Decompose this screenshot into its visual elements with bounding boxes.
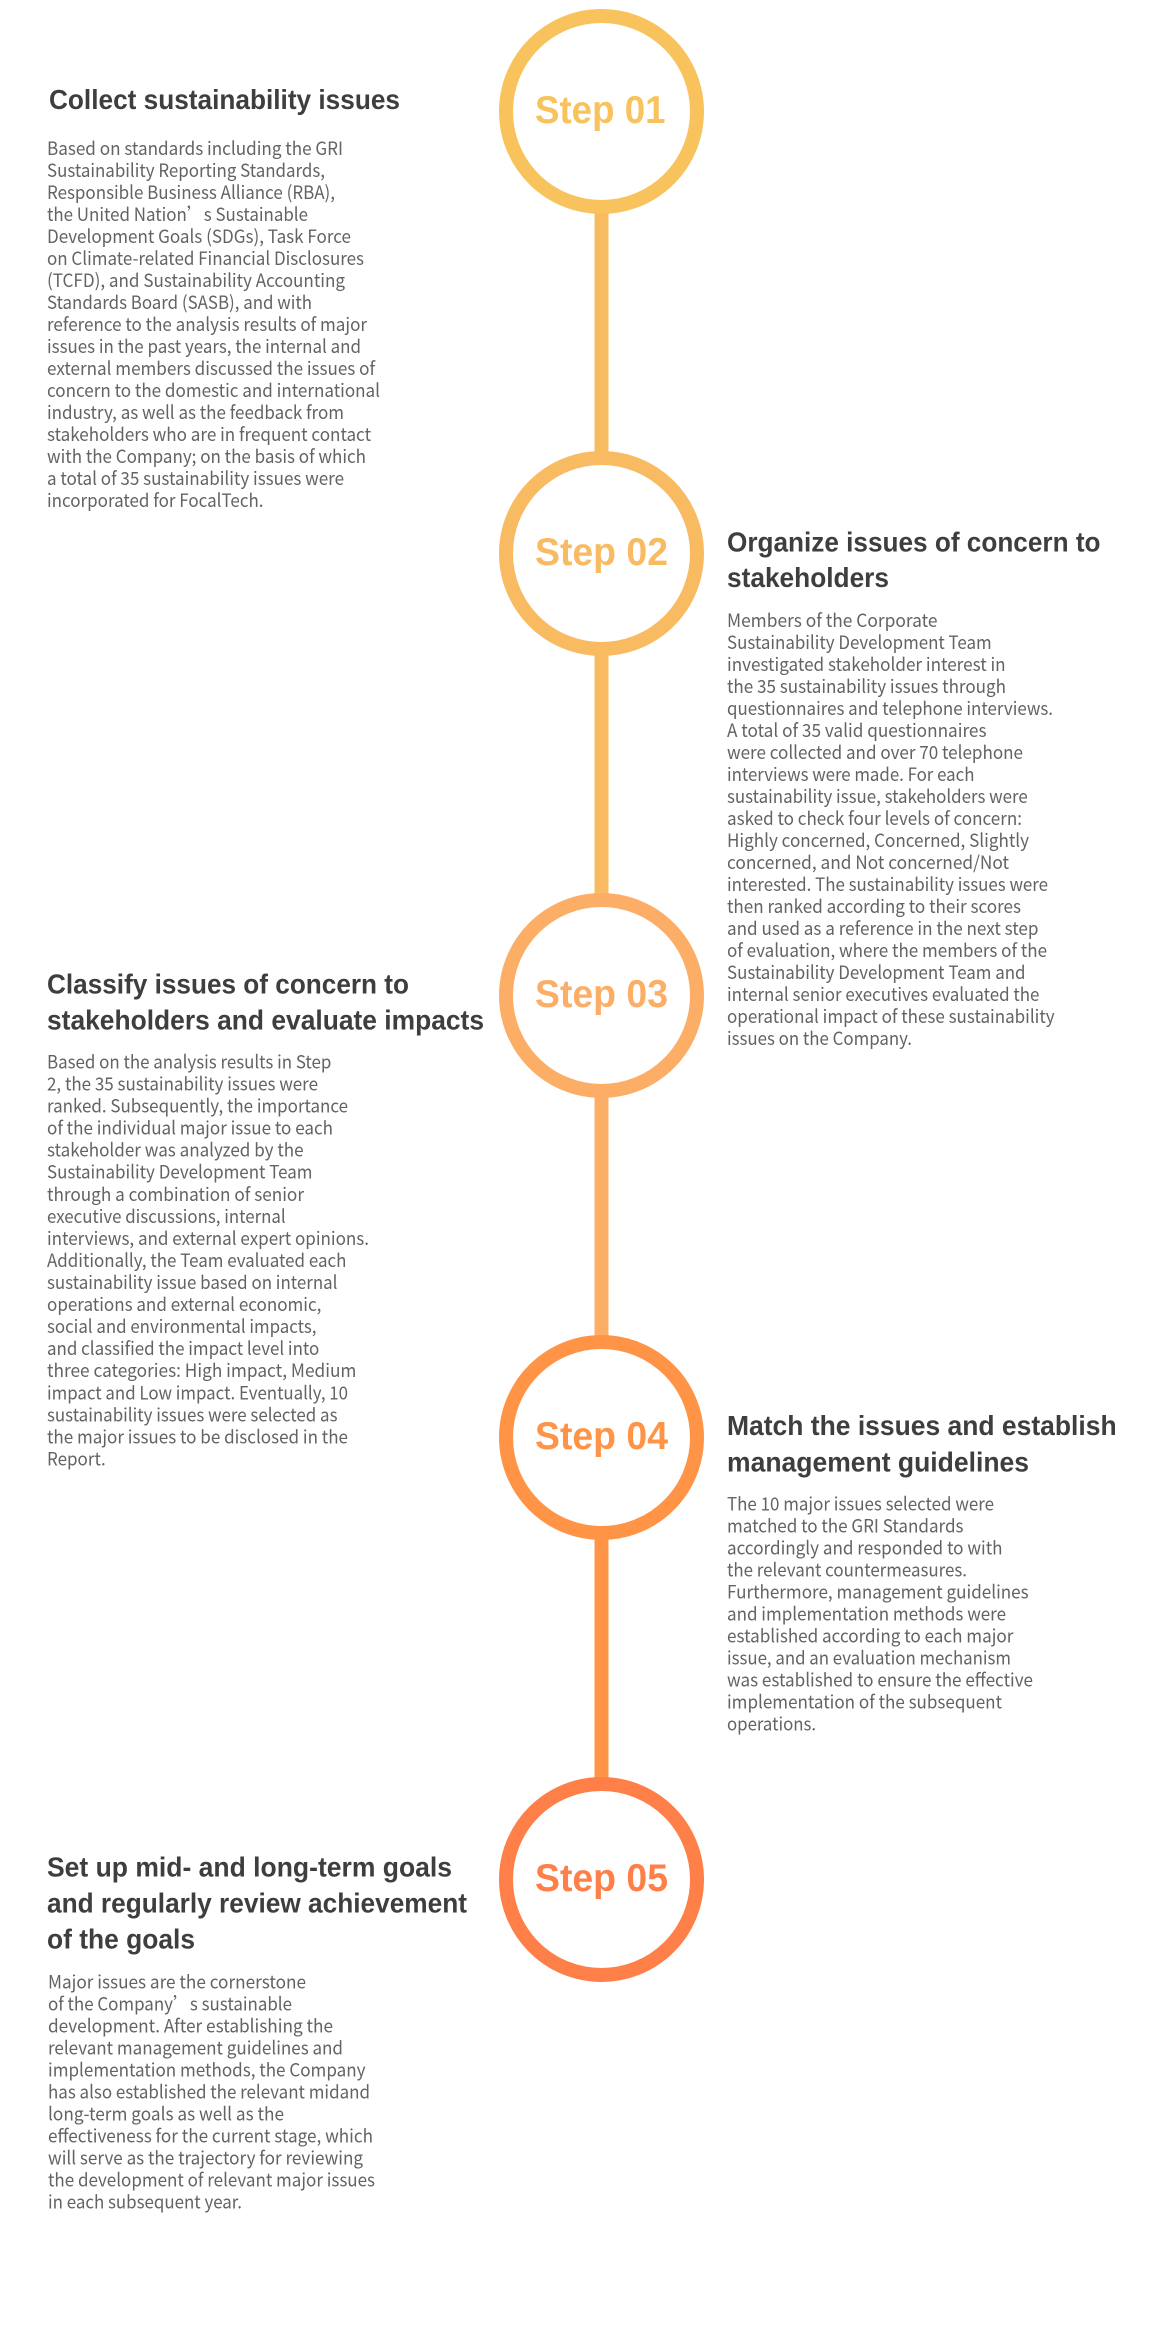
heading: step 04: management guidelines	[727, 1446, 1029, 1478]
body text: step 05: relevant management guidelines and	[48, 2035, 343, 2061]
body text: step 01: external members discussed the issues of	[47, 355, 376, 381]
body text: step 04: operations.	[727, 1711, 816, 1737]
body text: step 04: implementation of the subsequent	[727, 1689, 1002, 1715]
heading: step 02: Organize issues of concern to	[727, 526, 1100, 558]
body text: step 05: in each subsequent year.	[48, 2189, 242, 2215]
body text: step 04: Furthermore, management guidelines	[727, 1579, 1029, 1605]
step 03 badge	[506, 900, 697, 1091]
heading: step 05: Set up mid- and long-term goals	[47, 1852, 452, 1883]
heading: step 03: Classify issues of concern to	[47, 968, 409, 1000]
body text: step 03: interviews, and external expert opinions.	[47, 1225, 369, 1251]
body text: step 03	[47, 1048, 369, 1472]
body text: step 05	[48, 1969, 375, 2215]
body text: step 02: questionnaires and telephone interviews.	[727, 695, 1053, 721]
body text: step 05: the development of relevant major issues	[48, 2167, 375, 2193]
body text: step 03: social and environmental impacts,	[47, 1313, 316, 1339]
body text: step 05: long-term goals as well as the	[48, 2101, 284, 2127]
step 03 badge: Step 03	[535, 973, 668, 1016]
body text: step 01: Responsible Business Alliance (RBA),	[47, 179, 335, 205]
body text: step 02: Sustainability Development Team and	[727, 959, 1026, 985]
body text: step 01: (TCFD), and Sustainability Accounting	[47, 267, 345, 293]
body text: step 04: and implementation methods were	[727, 1601, 1006, 1627]
body text: step 03: three categories: High impact, Medium	[47, 1357, 356, 1383]
heading: step 04: Match the issues and establish	[727, 1410, 1117, 1441]
body text: step 04: The 10 major issues selected were	[727, 1491, 994, 1517]
body text: step 05: development. After establishing the	[48, 2013, 333, 2039]
body text: step 03: Report.	[47, 1446, 106, 1472]
body text: step 01: Sustainability Reporting Standards,	[47, 157, 325, 183]
body text: step 02: sustainability issue, stakeholders were	[727, 783, 1028, 809]
connector: step 04 to 05	[594, 1536, 608, 1780]
body text: step 03: sustainability issue based on internal	[47, 1269, 338, 1295]
body text: step 04: established according to each major	[727, 1623, 1014, 1649]
body text: step 03: the major issues to be disclosed in the	[47, 1424, 348, 1450]
body text: step 02: Sustainability Development Team	[727, 629, 992, 655]
connector: step 03 to 04	[594, 1094, 608, 1338]
connector: step 02 to 03	[594, 652, 608, 896]
body text: step 01: concern to the domestic and international	[47, 377, 380, 403]
body text: step 01: with the Company; on the basis of which	[47, 443, 366, 469]
step 05 badge: Step 05	[535, 1857, 668, 1900]
body text: step 03: ranked. Subsequently, the importance	[47, 1092, 348, 1118]
heading: step 04	[727, 1410, 1117, 1478]
body text: step 01: stakeholders who are in frequent contact	[47, 421, 371, 447]
body text: step 02: the 35 sustainability issues through	[727, 673, 1006, 699]
body text: step 03: impact and Low impact. Eventually, 10	[47, 1379, 348, 1405]
body text: step 02: A total of 35 valid questionnaires	[727, 717, 986, 743]
body text: step 03: Based on the analysis results in Step	[47, 1048, 331, 1074]
body text: step 02: and used as a reference in the next step	[727, 915, 1038, 941]
step 04 badge: Step 04	[535, 1415, 668, 1458]
body text: step 01: incorporated for FocalTech.	[47, 487, 264, 513]
body text: step 03: 2, the 35 sustainability issues were	[47, 1070, 318, 1096]
body text: step 01: the United Nation’s Sustainable	[47, 201, 308, 227]
body text: step 04	[727, 1491, 1033, 1737]
step 01 badge	[506, 16, 697, 207]
heading: step 02: stakeholders	[727, 562, 889, 593]
body text: step 05: Major issues are the cornerstone	[48, 1969, 306, 1995]
heading: step 03: stakeholders and evaluate impacts	[47, 1004, 484, 1036]
heading: step 02	[727, 526, 1100, 593]
body text: step 01: industry, as well as the feedback from	[47, 399, 344, 425]
body text: step 03: Sustainability Development Team	[47, 1159, 312, 1185]
body text: step 03: sustainability issues were selected as	[47, 1401, 338, 1427]
body text: step 02: interviews were made. For each	[727, 761, 974, 787]
body text: step 02: investigated stakeholder interest in	[727, 651, 1006, 677]
body text: step 02: were collected and over 70 telephone	[727, 739, 1023, 765]
body text: step 03: and classified the impact level into	[47, 1335, 319, 1361]
step 01 badge: Step 01	[535, 89, 666, 132]
body text: step 05: implementation methods, the Company	[48, 2057, 366, 2083]
step 02 badge: Step 02	[535, 531, 668, 574]
heading: step 05	[47, 1852, 467, 1954]
body text: step 03: through a combination of senior	[47, 1181, 305, 1207]
body text: step 02: then ranked according to their scores	[727, 893, 1021, 919]
body text: step 02: operational impact of these sustainability	[727, 1003, 1055, 1029]
body text: step 05: has also established the relevant midand	[48, 2079, 370, 2105]
body text: step 01: Standards Board (SASB), and with	[47, 289, 312, 315]
body text: step 02: asked to check four levels of concern:	[727, 805, 1022, 831]
body text: step 03: Additionally, the Team evaluated each	[47, 1247, 346, 1273]
body text: step 02: issues on the Company.	[727, 1025, 912, 1051]
step 02 badge	[506, 458, 697, 649]
body text: step 01: on Climate-related Financial Disclosures	[47, 245, 364, 271]
body text: step 04: matched to the GRI Standards	[727, 1513, 964, 1539]
body text: step 03: executive discussions, internal	[47, 1203, 286, 1229]
body text: step 01: issues in the past years, the internal and	[47, 333, 361, 359]
body text: step 01: Development Goals (SDGs), Task Force	[47, 223, 351, 249]
body text: step 01: reference to the analysis results of major	[47, 311, 368, 337]
body text: step 01: a total of 35 sustainability issues were	[47, 465, 344, 491]
body text: step 04: the relevant countermeasures.	[727, 1557, 967, 1583]
body text: step 02: Highly concerned, Concerned, Slightly	[727, 827, 1029, 853]
step 04 badge	[506, 1342, 697, 1533]
body text: step 04: issue, and an evaluation mechanism	[727, 1645, 1011, 1671]
body text: step 02: concerned, and Not concerned/Not	[727, 849, 1009, 875]
heading: step 01: Collect sustainability issues	[49, 84, 400, 115]
heading: step 05: and regularly review achievement	[47, 1888, 467, 1919]
body text: step 01	[47, 135, 380, 513]
body text: step 05: of the Company’s sustainable	[48, 1991, 292, 2017]
body text: step 01: Based on standards including the GRI	[47, 135, 343, 161]
body text: step 02: Members of the Corporate	[727, 607, 938, 633]
body text: step 03: operations and external economic,	[47, 1291, 321, 1317]
connector: step 01 to 02	[594, 210, 608, 454]
body text: step 05: will serve as the trajectory for reviewing	[48, 2145, 363, 2171]
body text: step 02: of evaluation, where the members of the	[727, 937, 1047, 963]
body text: step 03: of the individual major issue to each	[47, 1115, 333, 1141]
body text: step 02: internal senior executives evaluated the	[727, 981, 1039, 1007]
body text: step 02	[727, 607, 1055, 1051]
body text: step 03: stakeholder was analyzed by the	[47, 1137, 304, 1163]
heading: step 05: of the goals	[47, 1924, 195, 1954]
heading: step 03	[47, 968, 484, 1036]
body text: step 04: was established to ensure the effective	[727, 1667, 1033, 1693]
step 05 badge	[506, 1784, 697, 1975]
body text: step 05: effectiveness for the current stage, which	[48, 2123, 373, 2149]
body text: step 02: interested. The sustainability issues were	[727, 871, 1048, 897]
body text: step 04: accordingly and responded to with	[727, 1535, 1002, 1561]
